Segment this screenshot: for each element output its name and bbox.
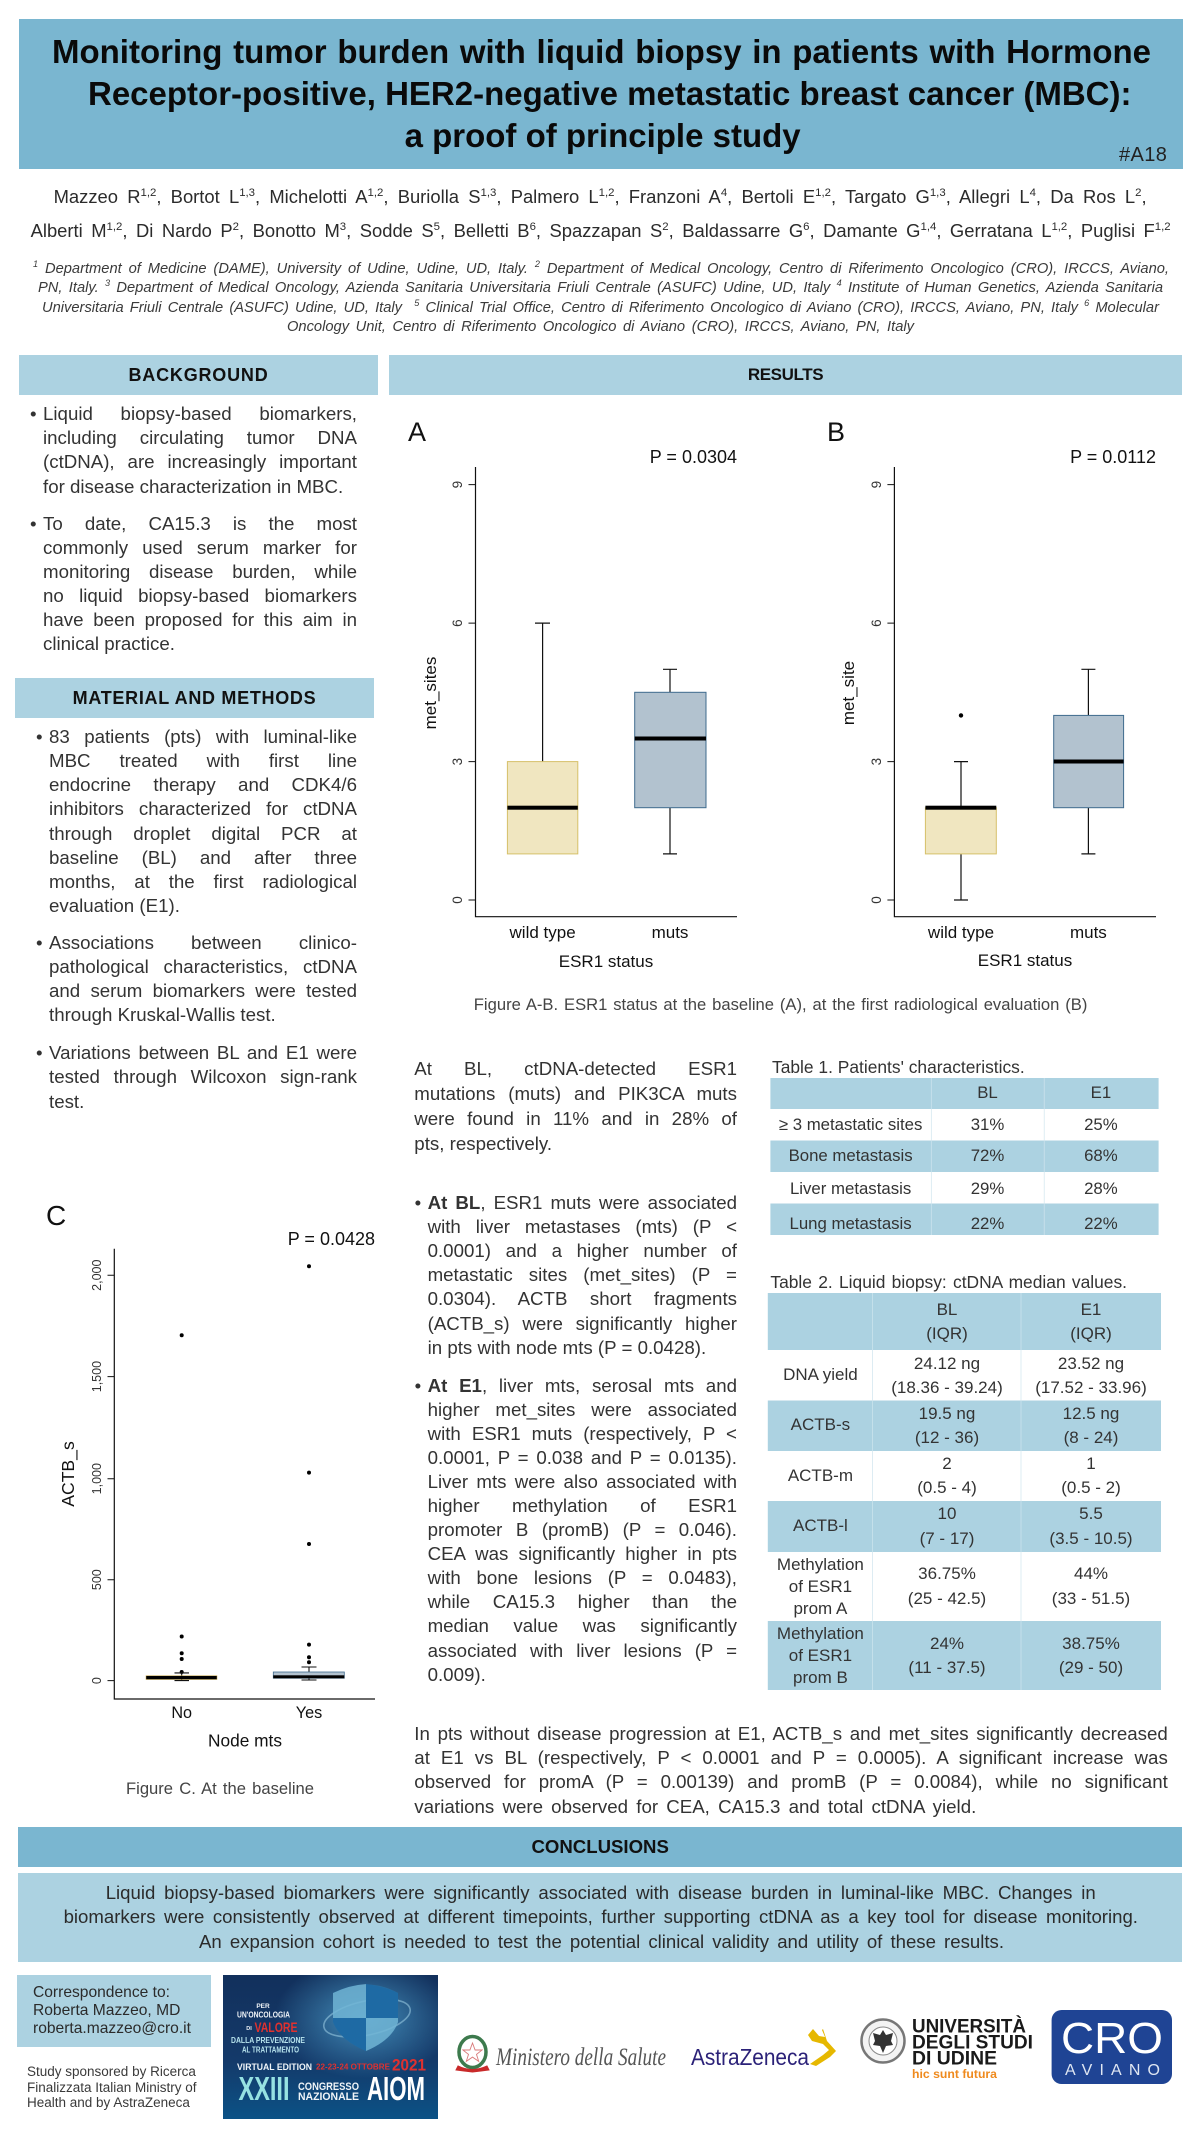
text: results at E1: Liver mts were also associated with — [428, 1471, 737, 1492]
title: Monitoring tumor burden with liquid biopsy in patients with Hormone — [52, 32, 1151, 70]
table 2: liquid biopsy ctDNA median values: Methylation — [777, 1555, 864, 1574]
table 2: liquid biopsy ctDNA median values: (8 - 24) — [1064, 1428, 1118, 1447]
conclusions text: An expansion cohort is needed to test the potential clinical validity and utility of these results. — [199, 1931, 1004, 1952]
text: changes without progression: In pts without disease progression at E1, ACTB_s and met_sites significantly decreased — [414, 1722, 1168, 1744]
logo: Università degli Studi di Udine: DEGLI STUDI — [912, 2032, 1033, 2054]
AIOM congress banner: PER — [256, 2003, 270, 2010]
logo: CRO Aviano: AVIANO — [1065, 2062, 1160, 2079]
table 2: liquid biopsy ctDNA median values: prom B — [793, 1668, 848, 1687]
table 1: patients' characteristics: 28% — [1084, 1179, 1118, 1198]
chart A: box plot of met_sites by ESR1 status: 9 — [450, 481, 465, 488]
sponsor note: Health and by AstraZeneca — [27, 2095, 190, 2110]
text: results at BL: with liver metastases (mts) (P < — [428, 1216, 737, 1237]
text: results at BL: At BL, ESR1 muts were associated — [428, 1192, 737, 1212]
text: results at E1: promoter B (promB) (P = 0.046). — [428, 1519, 737, 1540]
logo: CRO Aviano: CRO — [1061, 2014, 1163, 2063]
table 1: patients' characteristics: 25% — [1084, 1115, 1118, 1134]
table 2: liquid biopsy ctDNA median values: (18.36 - 39.24) — [891, 1378, 1003, 1397]
text: methods bullet 1: endocrine therapy and CDK4/6 — [49, 774, 357, 795]
table 2: liquid biopsy ctDNA median values: ACTB-l — [793, 1516, 848, 1535]
text: background bullet 1: Liquid biopsy-based biomarkers, — [43, 403, 357, 424]
table 2: liquid biopsy ctDNA median values: (IQR) — [1070, 1324, 1112, 1343]
table 2: liquid biopsy ctDNA median values: 12.5 ng — [1063, 1404, 1119, 1423]
affiliations: PN, Italy. 3 Department of Medical Oncology, Azienda Sanitaria Universitaria Friuli Centrale (ASUFC) Udine, UD, Italy 4 Institute of Human Genetics, Azienda Sanitaria — [38, 279, 1163, 296]
text: changes without progression: observed for promA (P = 0.00139) and promB (P = 0.0084), while no significant — [414, 1771, 1168, 1792]
chart C: box plot of ACTB_s by node metastases: No — [171, 1704, 192, 1722]
table 1: patients' characteristics: BL — [977, 1083, 998, 1102]
text: methods bullet 2: and serum biomarkers were tested — [49, 980, 357, 1001]
text: methods bullet 1: through droplet digital PCR at — [49, 823, 357, 844]
title — [52, 32, 1151, 154]
table 2: liquid biopsy ctDNA median values: of ESR1 — [789, 1646, 852, 1665]
chart C: box plot of ACTB_s by node metastases: 1,000 — [90, 1463, 104, 1494]
text: results at E1: with ESR1 muts (respectively, P < — [428, 1423, 737, 1444]
chart A: box plot of met_sites by ESR1 status: 6 — [450, 619, 465, 627]
chart B: box plot of met_site by ESR1 status: ESR1 status — [978, 951, 1072, 970]
table 1: patients' characteristics: E1 — [1091, 1083, 1111, 1102]
chart C: box plot of ACTB_s by node metastases: C — [46, 1200, 66, 1231]
text: methods bullet 2: pathological characteristics, ctDNA — [49, 956, 357, 977]
authors — [30, 186, 1171, 241]
chart C: box plot of ACTB_s by node metastases: ACTB_s — [58, 1441, 79, 1507]
text: methods bullet 1: baseline (BL) and after three — [49, 847, 357, 868]
correspondence box: Correspondence to: — [33, 1984, 170, 2000]
chart A: box plot of met_sites by ESR1 status: ESR1 status — [559, 952, 653, 971]
text: methods bullet 1: inhibitors characterized for ctDNA — [49, 798, 357, 819]
caption: figure C: Figure C. At the baseline — [126, 1779, 314, 1798]
table 1: patients' characteristics: Lung metastasis — [789, 1214, 912, 1233]
table 2: liquid biopsy ctDNA median values: (3.5 - 10.5) — [1049, 1529, 1133, 1548]
table 2 caption: Table 2. Liquid biopsy: ctDNA median values. — [770, 1272, 1127, 1292]
heading: results: RESULTS — [748, 365, 823, 384]
chart C: box plot of ACTB_s by node metastases: P = 0.0428 — [288, 1229, 375, 1249]
text: methods bullet 1: evaluation (E1). — [49, 895, 180, 916]
AIOM congress banner: VALORE — [254, 2019, 298, 2035]
text: results at E1: median value was significantly — [428, 1615, 737, 1636]
chart C: box plot of ACTB_s by node metastases: 0 — [90, 1677, 104, 1684]
chart C: box plot of ACTB_s by node metastases: 2,000 — [90, 1260, 104, 1291]
text: ESR1 and PIK3CA mutations: pts, respectively. — [414, 1133, 552, 1154]
chart C: box plot of ACTB_s by node metastases: 1,500 — [90, 1361, 104, 1392]
table 1: patients' characteristics: 68% — [1084, 1146, 1118, 1165]
AIOM congress banner: XXIII — [238, 2070, 290, 2107]
table 1 caption: Table 1. Patients' characteristics. — [772, 1057, 1025, 1077]
text: • — [36, 932, 43, 953]
text: methods bullet 1: MBC treated with first line — [49, 750, 357, 771]
affiliations: Universitaria Friuli Centrale (ASUFC) Udine, UD, Italy 5 Clinical Trial Office, Centro di Riferimento Oncologico di Aviano (CRO), IRCCS, Aviano, PN, Italy 6 Molecular — [42, 298, 1159, 316]
conclusions text: Liquid biopsy-based biomarkers were significantly associated with disease burden in luminal-like MBC. Changes in — [106, 1882, 1096, 1902]
table 1: patients' characteristics: ≥ 3 metastatic sites — [779, 1115, 922, 1134]
poster code: #A18 — [1119, 144, 1167, 166]
table 2: liquid biopsy ctDNA median values: Methylation — [777, 1624, 864, 1643]
text: background bullet 1: for disease characterization in MBC. — [43, 476, 343, 497]
chart C: box plot of ACTB_s by node metastases — [46, 1200, 375, 1750]
AIOM congress banner: DI — [246, 2026, 252, 2032]
table 2: liquid biopsy ctDNA median values: ACTB-s — [791, 1415, 850, 1434]
AIOM congress banner: AL TRATTAMENTO — [242, 2046, 299, 2054]
AIOM congress banner: 22-23-24 OTTOBRE — [316, 2062, 391, 2072]
text: background bullet 2: commonly used serum marker for — [43, 537, 357, 558]
table 2: liquid biopsy ctDNA median values: 10 — [938, 1504, 956, 1523]
chart A: box plot of met_sites by ESR1 status — [408, 417, 737, 971]
chart B: box plot of met_site by ESR1 status: 6 — [869, 619, 884, 627]
text: • — [415, 1374, 421, 1396]
table 2: liquid biopsy ctDNA median values: 1 — [1086, 1454, 1096, 1473]
text: • — [415, 1192, 421, 1212]
text: ESR1 and PIK3CA mutations — [414, 1058, 737, 1154]
title: a proof of principle study — [405, 116, 801, 154]
authors: Alberti M1,2, Di Nardo P2, Bonotto M3, Sodde S5, Belletti B6, Spazzapan S2, Baldassarre G6, Damante G1,4, Gerratana L1,2, Puglisi F1,2 — [31, 220, 1171, 241]
table 2: liquid biopsy ctDNA median values: (IQR) — [926, 1324, 968, 1343]
text: results at E1: 0.0001, P = 0.038 and P = 0.0135). — [428, 1447, 737, 1468]
text: changes without progression: at E1 vs BL (respectively, P < 0.0001 and P = 0.0005). A significant increase was — [414, 1747, 1168, 1768]
table 2: liquid biopsy ctDNA median values: (33 - 51.5) — [1052, 1589, 1130, 1608]
text: results at E1: At E1, liver mts, serosal mts and — [428, 1374, 737, 1396]
title banner — [19, 19, 1183, 169]
text: methods bullet 2 — [36, 932, 357, 1025]
logo: Ministero della Salute — [455, 2034, 666, 2072]
authors: Mazzeo R1,2, Bortot L1,3, Michelotti A1,2, Buriolla S1,3, Palmero L1,2, Franzoni A4, Bertoli E1,2, Targato G1,3, Allegri L4, Da Ros L2, — [54, 186, 1147, 207]
table 1: patients' characteristics: 22% — [1084, 1214, 1118, 1233]
table 2: liquid biopsy ctDNA median values: 44% — [1074, 1564, 1108, 1583]
heading: conclusions: CONCLUSIONS — [531, 1836, 669, 1857]
table 2: liquid biopsy ctDNA median values: (7 - 17) — [920, 1529, 974, 1548]
table 1: patients' characteristics: 29% — [971, 1179, 1004, 1198]
text: results at BL — [415, 1192, 737, 1358]
chart B: box plot of met_site by ESR1 status: B — [827, 417, 845, 447]
chart A: box plot of met_sites by ESR1 status: 0 — [450, 896, 465, 904]
heading: background: BACKGROUND — [128, 365, 268, 385]
chart B: box plot of met_site by ESR1 status: muts — [1070, 923, 1107, 942]
text: methods bullet 3 — [36, 1042, 357, 1112]
text: ESR1 and PIK3CA mutations: At BL, ctDNA-detected ESR1 — [414, 1058, 737, 1079]
text: results at E1: 0.009). — [428, 1664, 486, 1685]
table 2: liquid biopsy ctDNA median values: DNA yield — [783, 1365, 858, 1384]
text: • — [30, 403, 37, 424]
text: results at E1: CEA was significantly higher in pts — [428, 1543, 737, 1564]
table 2: liquid biopsy ctDNA median values: BL — [937, 1300, 957, 1319]
affiliations — [33, 259, 1169, 335]
text: methods bullet 1 — [36, 726, 357, 916]
table 2: liquid biopsy ctDNA median values: (17.52 - 33.96) — [1035, 1378, 1147, 1397]
table 2: liquid biopsy ctDNA median values: (0.5 - 4) — [917, 1478, 977, 1497]
chart C: box plot of ACTB_s by node metastases: Yes — [296, 1704, 322, 1722]
AIOM congress banner: NAZIONALE — [298, 2091, 359, 2103]
affiliations: Oncology Unit, Centro di Riferimento Oncologico di Aviano (CRO), IRCCS, Aviano, PN, Italy — [287, 319, 914, 335]
correspondence box: Roberta Mazzeo, MD — [33, 2002, 180, 2019]
chart A: box plot of met_sites by ESR1 status: 3 — [450, 758, 465, 765]
text: ESR1 and PIK3CA mutations: were found in 11% and in 28% of — [414, 1108, 737, 1129]
logo: AstraZeneca — [691, 2029, 836, 2069]
text: results at BL: 0.0001) and a higher number of — [428, 1240, 737, 1261]
chart B: box plot of met_site by ESR1 status: met_site — [839, 661, 858, 725]
conclusions text: biomarkers were consistently observed at different timepoints, further supporting ctDNA as a key tool for disease monitoring. — [64, 1906, 1138, 1927]
text: • — [36, 1042, 43, 1062]
sponsor note: Study sponsored by Ricerca — [27, 2064, 196, 2079]
sponsor note: Finalizzata Italian Ministry of — [27, 2080, 197, 2095]
text: methods bullet 3: test. — [49, 1090, 84, 1112]
text: methods bullet 2: Associations between clinico- — [49, 932, 357, 953]
chart C: box plot of ACTB_s by node metastases: 500 — [90, 1569, 104, 1590]
text: • — [36, 726, 43, 746]
table 2: liquid biopsy ctDNA median values: ACTB-m — [788, 1466, 853, 1485]
table 2: liquid biopsy ctDNA median values: 5.5 — [1079, 1504, 1103, 1523]
logo: Università degli Studi di Udine — [860, 2015, 1033, 2081]
chart B: box plot of met_site by ESR1 status: 3 — [869, 758, 884, 765]
table 2: liquid biopsy ctDNA median values: 24.12 ng — [914, 1354, 980, 1373]
text: methods bullet 3: tested through Wilcoxon sign-rank — [49, 1066, 357, 1087]
chart A: box plot of met_sites by ESR1 status: met_sites — [421, 657, 440, 729]
table 2: liquid biopsy ctDNA median values — [768, 1293, 1161, 1690]
logo: Università degli Studi di Udine: DI UDINE — [912, 2048, 997, 2070]
table 2: liquid biopsy ctDNA median values: (0.5 - 2) — [1061, 1478, 1121, 1497]
AIOM congress banner — [223, 1975, 438, 2119]
table 1: patients' characteristics — [770, 1078, 1159, 1235]
text: methods bullet 1: 83 patients (pts) with luminal-like — [49, 726, 357, 746]
text: results at E1: with bone lesions (P = 0.0483), — [428, 1567, 737, 1588]
logo: CRO Aviano — [1052, 2010, 1172, 2084]
table 1: patients' characteristics: Bone metastasis — [789, 1146, 913, 1165]
heading: results — [389, 355, 1182, 395]
text: results at BL: in pts with node mts (P = 0.0428). — [428, 1337, 706, 1358]
table 1: patients' characteristics: Liver metastasis — [790, 1179, 911, 1198]
AIOM congress banner: 2021 — [392, 2056, 426, 2074]
text: methods bullet 3: Variations between BL and E1 were — [49, 1042, 357, 1062]
text: ESR1 and PIK3CA mutations: mutations (muts) and PIK3CA muts — [414, 1083, 737, 1104]
table 2: liquid biopsy ctDNA median values: (12 - 36) — [915, 1428, 979, 1447]
correspondence box: roberta.mazzeo@cro.it — [33, 2020, 191, 2037]
text: results at E1: associated with liver lesions (P = — [428, 1640, 737, 1661]
table 2: liquid biopsy ctDNA median values: of ESR1 — [789, 1577, 852, 1596]
table 2: liquid biopsy ctDNA median values: prom A — [793, 1599, 848, 1618]
correspondence box — [17, 1975, 211, 2047]
title: Receptor-positive, HER2-negative metastatic breast cancer (MBC): — [88, 74, 1131, 112]
text: results at BL: 0.0304). ACTB short fragments — [428, 1288, 737, 1309]
table 2: liquid biopsy ctDNA median values: (29 - 50) — [1059, 1658, 1123, 1677]
table 2: liquid biopsy ctDNA median values: 23.52 ng — [1058, 1354, 1124, 1373]
text: background bullet 2: To date, CA15.3 is the most — [43, 513, 357, 534]
table 2: liquid biopsy ctDNA median values: 24% — [930, 1634, 964, 1653]
text: background bullet 2: clinical practice. — [43, 633, 175, 654]
table 2: liquid biopsy ctDNA median values: 38.75% — [1062, 1634, 1120, 1653]
chart B: box plot of met_site by ESR1 status: wild type — [927, 923, 994, 942]
table 2: liquid biopsy ctDNA median values: (11 - 37.5) — [908, 1658, 986, 1677]
text: background bullet 2: monitoring disease burden, while — [43, 561, 357, 582]
chart A: box plot of met_sites by ESR1 status: P = 0.0304 — [650, 447, 737, 467]
chart B: box plot of met_site by ESR1 status: P = 0.0112 — [1070, 447, 1156, 467]
table 2: liquid biopsy ctDNA median values: 19.5 ng — [919, 1404, 975, 1423]
text: background bullet 1 — [30, 403, 357, 497]
text: • — [30, 513, 37, 534]
text: methods bullet 1: months, at the first radiological — [49, 871, 357, 892]
text: background bullet 1: including circulating tumor DNA — [43, 427, 357, 448]
text: results at E1: higher met_sites were associated — [428, 1399, 737, 1420]
chart B: box plot of met_site by ESR1 status: 0 — [869, 896, 884, 904]
AIOM congress banner: UN'ONCOLOGIA — [237, 2010, 290, 2020]
table 1: patients' characteristics: 22% — [971, 1214, 1004, 1233]
chart B: box plot of met_site by ESR1 status — [827, 417, 1156, 970]
logo: Università degli Studi di Udine: UNIVERSITÀ — [912, 2016, 1026, 2038]
text: results at BL: metastatic sites (met_sites) (P = — [428, 1264, 737, 1285]
text: background bullet 2: have been proposed for this aim in — [43, 609, 357, 630]
heading: material and methods — [15, 678, 374, 718]
chart A: box plot of met_sites by ESR1 status: wild type — [509, 923, 576, 942]
chart A: box plot of met_sites by ESR1 status: muts — [652, 923, 688, 942]
text: changes without progression: variations were observed for CEA, CA15.3 and total ctDNA yield. — [414, 1796, 976, 1817]
text: background bullet 1: (ctDNA), are increasingly important — [43, 451, 357, 472]
heading: conclusions — [18, 1827, 1182, 1867]
table 1: patients' characteristics: 31% — [971, 1115, 1004, 1134]
affiliations: 1 Department of Medicine (DAME), University of Udine, Udine, UD, Italy. 2 Department of Medical Oncology, Centro di Riferimento Oncologico (CRO), IRCCS, Aviano, — [33, 259, 1169, 277]
text: results at E1 — [415, 1374, 737, 1685]
chart A: box plot of met_sites by ESR1 status: A — [408, 417, 426, 447]
heading: background — [19, 355, 378, 395]
chart B: box plot of met_site by ESR1 status: 9 — [869, 481, 884, 488]
table 2: liquid biopsy ctDNA median values: 2 — [942, 1454, 952, 1473]
caption: figure A-B: Figure A-B. ESR1 status at the baseline (A), at the first radiological evaluation (B) — [474, 995, 1087, 1014]
conclusions text — [18, 1873, 1182, 1962]
table 2: liquid biopsy ctDNA median values: E1 — [1081, 1300, 1101, 1319]
heading: material and methods: MATERIAL AND METHODS — [73, 688, 316, 708]
sponsor note — [27, 2064, 197, 2110]
table 2: liquid biopsy ctDNA median values: (25 - 42.5) — [908, 1589, 986, 1608]
AIOM congress banner: DALLA PREVENZIONE — [231, 2036, 306, 2045]
AIOM congress banner: CONGRESSO — [298, 2081, 359, 2093]
logo: Università degli Studi di Udine: hic sunt futura — [912, 2069, 998, 2081]
text: background bullet 2: no liquid biopsy-based biomarkers — [43, 585, 357, 606]
text: results at E1: while CA15.3 higher than the — [428, 1591, 737, 1612]
text: methods bullet 2: through Kruskal-Wallis test. — [49, 1004, 276, 1025]
text: results at E1: higher methylation of ESR1 — [428, 1495, 737, 1516]
AIOM congress banner: VIRTUAL EDITION — [237, 2062, 312, 2072]
table 1: patients' characteristics: 72% — [971, 1146, 1004, 1165]
text: results at BL: (ACTB_s) were significantly higher — [428, 1313, 737, 1334]
text: changes without progression — [414, 1722, 1168, 1817]
chart C: box plot of ACTB_s by node metastases: Node mts — [208, 1730, 282, 1750]
table 2: liquid biopsy ctDNA median values: 36.75% — [918, 1564, 976, 1583]
text: background bullet 2 — [30, 513, 357, 654]
